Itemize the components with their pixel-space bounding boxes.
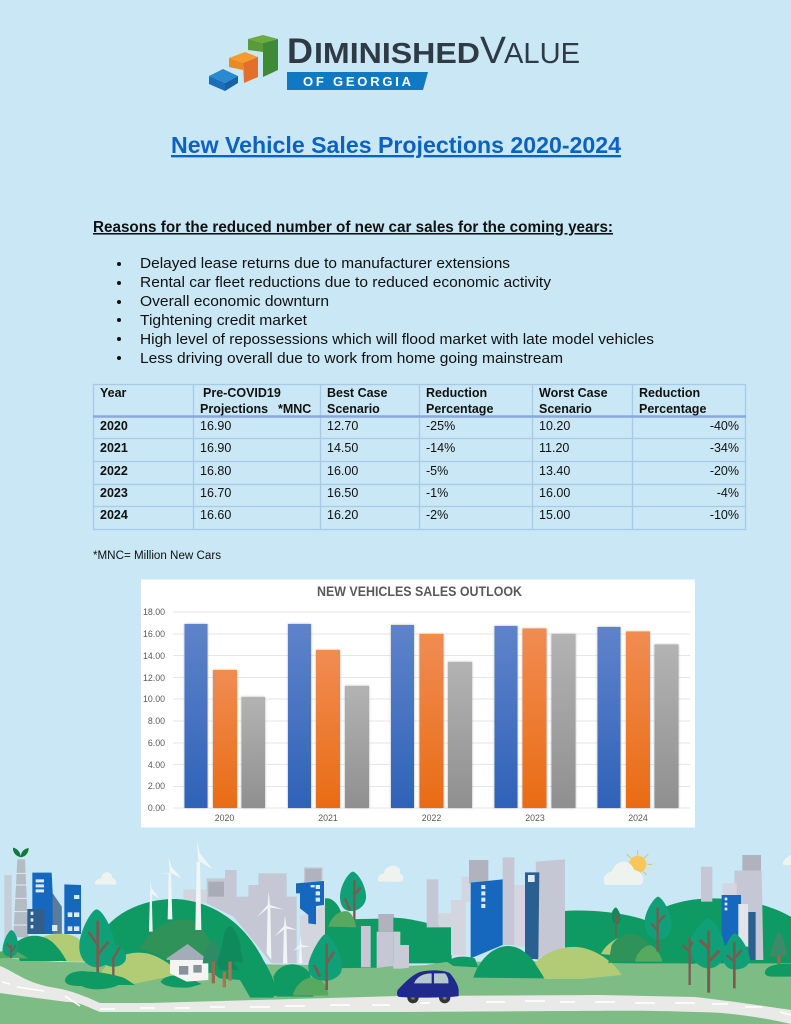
y axis labels: 18.00 [143,607,165,617]
scene: right half [392,850,791,1005]
bar chart [141,580,695,828]
table rows: 2024 [100,508,128,522]
trees left [3,909,126,976]
table rows: 16.20 [327,508,358,522]
y axis labels: 8.00 [148,716,165,726]
y axis labels: 0.00 [148,803,165,813]
table header: Year [100,386,127,400]
gray skyline [183,867,325,963]
table rows: 16.90 [200,441,231,455]
wind turbines [140,840,310,963]
table rows: 16.90 [200,419,231,433]
table rows: -4% [717,486,739,500]
cloud [378,866,400,882]
table rows: 15.00 [539,508,570,522]
table header: Percentage [639,402,706,416]
small hills [140,920,213,963]
table rows: -2% [426,508,448,522]
ground [393,962,791,1005]
table rows: 2021 [100,441,128,455]
table rows: -25% [426,419,455,433]
table header: Scenario [327,402,380,416]
cloud [95,872,116,885]
table rows: -14% [426,441,455,455]
icon: chimney with leaves [4,848,29,942]
ground wedge [80,975,251,1003]
data table [93,384,746,530]
blue tower [296,881,324,924]
skyline [427,857,565,958]
table rows: 10.20 [539,419,570,433]
pines [203,926,243,987]
icon: stacked cubes [209,35,278,91]
hills right [325,898,400,968]
bullet list: Less driving overall due to work from home going mainstream [140,350,563,367]
ground patch [0,958,250,1003]
table rows: 11.20 [539,441,569,455]
wordmark: IMINISHED [314,38,480,70]
bars: 2022 [391,625,472,808]
banner: of Georgia [287,72,428,90]
illustration: green city landscape [0,840,791,1024]
table rows: 14.50 [327,441,358,455]
bushes and trees right [273,964,313,997]
bullet list: Overall economic downturn [140,293,329,310]
icon: house [167,944,208,982]
x axis labels: 2023 [525,813,545,823]
y axis labels: 14.00 [143,651,165,661]
table rows: 2020 [100,419,128,433]
table rows: -40% [710,419,739,433]
bars: 2020 [184,624,265,808]
table header: Percentage [426,402,493,416]
bullet list: Delayed lease returns due to manufacturer extensions [140,255,510,272]
wordmark [287,30,580,72]
table header: *MNC [278,402,311,416]
ground right [273,965,400,998]
big green hill [107,899,278,998]
trees [612,897,791,993]
y axis labels: 10.00 [143,694,165,704]
bullet list: Rental car fleet reductions due to reduced economic activity [140,274,551,291]
blue buildings [27,873,81,934]
scene: left half [0,840,400,1003]
table header: Worst Case [539,386,608,400]
title: New Vehicle Sales Projections 2020-2024 [171,132,621,158]
table rows: 2022 [100,464,128,478]
chart title: NEW VEHICLES SALES OUTLOOK [317,583,522,599]
table rows: 2023 [100,486,128,500]
y axis labels: 6.00 [148,738,165,748]
table header: Reduction [639,386,700,400]
banner: of Georgia: OF GEORGIA [303,74,412,89]
wordmark: D [287,32,313,71]
table header: Scenario [539,402,592,416]
bullet list: Tightening credit market [140,312,308,329]
table rows [100,419,739,522]
road [0,966,791,1024]
table header: Projections [200,402,268,416]
table rows: 16.50 [327,486,358,500]
icon: blue car [397,970,459,1003]
wordmark: ALUE [504,38,580,70]
bars: 2021 [288,624,369,808]
table rows: -1% [426,486,448,500]
table rows: 13.40 [539,464,570,478]
far hills [565,898,791,967]
table header: Best Case [327,386,387,400]
bullet list [117,255,654,367]
y axis labels: 2.00 [148,781,165,791]
hills front [447,957,478,967]
x axis labels: 2024 [628,813,648,823]
y axis labels: 12.00 [143,673,165,683]
dark hill [393,918,452,963]
x axis labels [215,813,648,823]
icon: sun behind cloud [604,850,652,885]
wordmark: V [480,30,507,72]
table header: Reduction [426,386,487,400]
table rows: 12.70 [327,419,358,433]
footnote: *MNC= Million New Cars [93,550,221,562]
ground [0,958,791,1024]
table rows: 16.60 [200,508,231,522]
y axis labels: 16.00 [143,629,165,639]
x axis labels: 2021 [318,813,338,823]
table rows: -34% [710,441,739,455]
logo [209,30,580,91]
x axis labels: 2022 [422,813,441,823]
blue buildings [471,872,539,959]
table rows: 16.00 [327,464,358,478]
x axis labels: 2020 [215,813,234,823]
table header: Pre-COVID19 [203,386,281,400]
bullet list: High level of repossessions which will flood market with late model vehicles [140,331,654,348]
bars: 2024 [598,627,678,808]
table rows: 16.80 [200,464,231,478]
y axis labels: 4.00 [148,760,165,770]
y axis labels [143,607,165,813]
bars: 2023 [494,626,576,808]
reasons heading: Reasons for the reduced number of new car sales for the coming years: [93,219,613,236]
table rows: -5% [426,464,448,478]
table rows: -20% [710,464,739,478]
table header [100,386,706,416]
bushes [65,971,135,989]
table rows: 16.00 [539,486,570,500]
table rows: -10% [710,508,739,522]
cloud [392,868,403,882]
table rows: 16.70 [200,486,231,500]
right skyline [701,855,763,960]
